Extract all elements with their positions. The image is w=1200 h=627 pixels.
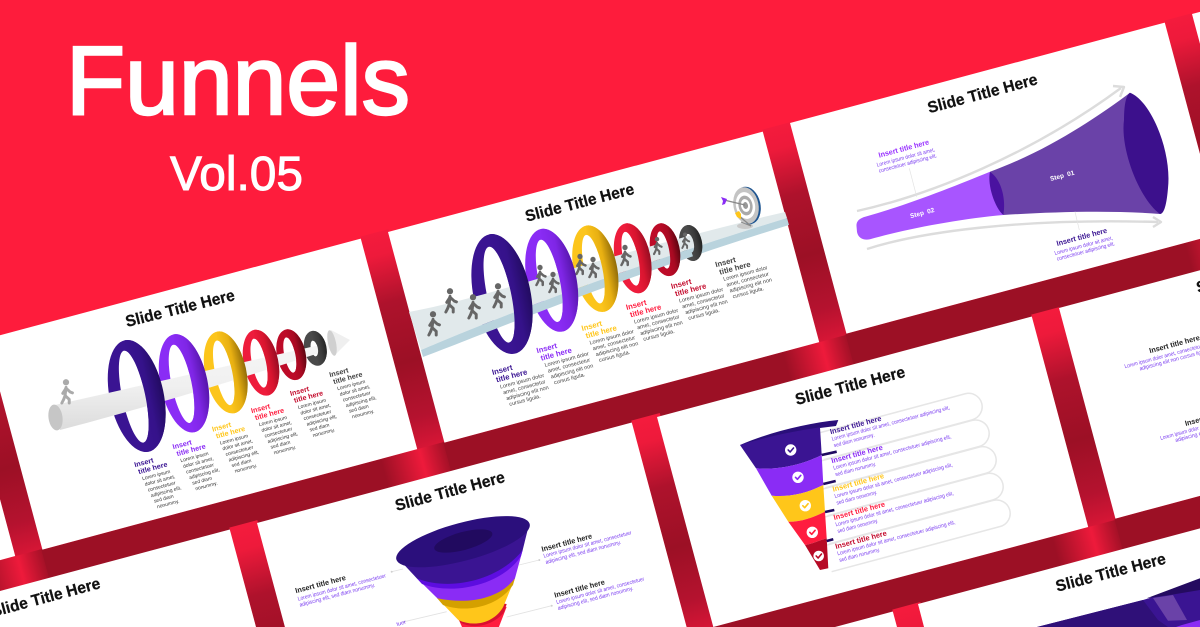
text columns: adipiscing elit non <box>506 385 549 402</box>
text columns: nonummy. <box>312 427 336 439</box>
panel: slide rings on rod: Slide Title Here <box>124 287 237 331</box>
panel: slide rings on rod <box>0 239 417 550</box>
people walking <box>429 232 689 335</box>
text columns: nonummy. <box>195 481 218 492</box>
text columns <box>491 247 774 410</box>
text columns: Lorem ipsum <box>258 415 288 428</box>
text columns: Insert <box>133 455 155 469</box>
text columns: nonummy. <box>351 409 375 420</box>
text columns: amet, consectetur <box>637 314 681 331</box>
text columns: nonummy. <box>273 445 297 456</box>
callout: lower text <box>1054 212 1116 263</box>
label: step 01: Step 01 <box>1049 170 1076 183</box>
text columns: Lorem ipsum dolor <box>544 351 590 369</box>
text columns: cursus ligula. <box>732 286 765 300</box>
text columns: title here <box>215 424 246 440</box>
text columns: adipiscing elit non <box>550 363 594 380</box>
text columns: amet, consectetur <box>547 358 591 375</box>
text columns: adipiscing elit non <box>640 320 683 337</box>
text columns: Lorem ipsum dolor <box>633 308 679 326</box>
text columns: Lorem ipsum dolor <box>589 329 635 347</box>
funnel cone <box>391 505 535 627</box>
text columns: Lorem ipsum <box>180 451 209 464</box>
text columns: sed diam <box>348 404 369 415</box>
text columns: adipiscing elit non <box>685 299 728 316</box>
list text: sed diam nonummy. <box>833 432 876 449</box>
list text: sed diam nonummy. <box>835 461 877 478</box>
road <box>409 212 789 357</box>
text columns: dolor sit amet, <box>222 438 254 452</box>
text columns: dolor sit amet, <box>300 403 332 417</box>
text columns: Insert <box>535 341 558 355</box>
list text: Insert title here <box>831 471 885 494</box>
text columns: title here <box>629 302 663 319</box>
panel: slide rings on road with target: Slide Title Here <box>523 181 636 226</box>
panel: slide horizontal funnel <box>790 23 1200 334</box>
text columns: nonummy. <box>156 499 180 510</box>
list pills <box>817 390 1013 572</box>
icon: walking person <box>62 379 72 403</box>
text columns: Insert <box>580 319 603 333</box>
funnel stack <box>740 420 838 570</box>
ring backs <box>461 220 706 360</box>
list text: sed diam nonummy. <box>837 518 879 535</box>
text columns: Insert <box>491 363 514 377</box>
callout: left upper text: adipiscing elit, sed diam nonummy. <box>299 583 376 609</box>
callout: upper text: Insert title here <box>877 137 930 160</box>
text columns: title here <box>674 281 708 298</box>
text columns: consectetuer <box>264 426 293 440</box>
callout: right upper text: Insert title here <box>540 531 593 554</box>
list text <box>829 405 956 564</box>
text columns: consectetuer <box>303 409 332 422</box>
text columns: Insert <box>250 401 272 415</box>
text columns: Lorem ipsum <box>337 379 366 392</box>
check icons <box>785 444 824 561</box>
callout: lower text: consectetuer adipiscing elit. <box>1056 241 1116 263</box>
panel: slide cone funnel <box>257 422 687 627</box>
text columns: title here <box>540 345 574 363</box>
text columns: Insert <box>289 384 311 398</box>
text columns: amet, consectetur <box>726 272 770 289</box>
text columns: Insert <box>714 255 737 269</box>
text columns: nonummy. <box>234 463 258 475</box>
text columns: adipiscing elit, <box>228 450 260 464</box>
text columns: Lorem ipsum dolor <box>499 373 545 391</box>
text columns: amet, consectetur <box>503 379 547 396</box>
text columns: consectetuer <box>342 390 372 404</box>
callout: right upper text: adipiscing elit, sed diam nonummy. <box>545 540 622 566</box>
text columns: adipiscing elit, <box>306 414 338 428</box>
text columns: consectetuer <box>186 462 215 476</box>
text columns: cursus ligula. <box>509 394 542 408</box>
funnel fragment <box>1037 578 1200 627</box>
list text: Lorem ipsum dolor sit amet, consectetuer adipiscing elit, <box>831 405 951 443</box>
text columns: adipiscing elit, <box>189 467 220 481</box>
text columns: dolor sit amet, <box>261 420 293 434</box>
text columns: sed diam <box>153 494 174 505</box>
callout: lower text: Insert title here <box>1055 226 1108 248</box>
text columns: cursus ligula. <box>643 329 676 343</box>
panel: slide bottom-right: Slide Title Here <box>1054 551 1168 596</box>
arrow: bottom guide <box>867 217 1161 249</box>
ring fronts <box>122 326 330 452</box>
text columns: cursus ligula. <box>688 308 721 322</box>
list text: Lorem ipsum dolor sit amet, consectetuer adipiscing elit, <box>837 520 956 557</box>
panel: slide funnel list: Slide Title Here <box>793 364 907 409</box>
panel: slide cone funnel: Slide Title Here <box>393 469 507 515</box>
list text: Lorem ipsum dolor sit amet, consectetuer adipiscing elit, <box>834 462 954 500</box>
callout: left upper text: Lorem ipsum dolor sit amet, consectetuer <box>297 573 387 603</box>
text columns: adipiscing elit non <box>595 341 639 358</box>
text columns: title here <box>585 323 619 340</box>
list text: Insert title here <box>829 414 882 436</box>
text columns: cursus ligula. <box>553 372 586 386</box>
main title: Funnels <box>66 26 410 135</box>
text columns: adipiscing elit non <box>729 277 773 294</box>
text columns: consectetuer <box>147 480 177 494</box>
list text: Lorem ipsum dolor sit amet, consectetuer adipiscing elit, <box>833 434 952 472</box>
list text: Lorem ipsum dolor sit amet, consectetuer adipiscing elit, <box>835 491 955 528</box>
list text: Insert title here <box>834 529 888 551</box>
text columns: Lorem ipsum <box>219 433 249 447</box>
text columns: dolor sit amet, <box>182 456 214 470</box>
text columns: consectetuer <box>225 445 254 458</box>
text columns: cursus ligula. <box>598 350 631 364</box>
text columns: sed diam <box>270 440 291 451</box>
funnel: step 01 section <box>990 93 1160 215</box>
text columns <box>133 360 380 513</box>
text columns: sed diam <box>231 458 252 469</box>
list text: sed diam nonummy. <box>836 490 878 507</box>
funnel: joint lens <box>989 172 1004 215</box>
text columns: adipiscing elit, <box>345 395 377 409</box>
text columns: title here <box>254 406 285 422</box>
text columns: title here <box>293 388 324 405</box>
panel: slide funnel list <box>657 316 1088 627</box>
connector lines <box>391 559 553 623</box>
arrow: top guide <box>857 86 1124 211</box>
text columns: dolor sit amet, <box>144 474 176 488</box>
list text: Insert title here <box>830 443 884 465</box>
text columns: dolor sit amet, <box>339 384 371 398</box>
list text: sed diam nonummy. <box>839 547 881 564</box>
rod with arrow tip <box>47 329 350 431</box>
text columns: Lorem ipsum dolor <box>723 265 768 283</box>
label: step 02: Step 02 <box>909 207 936 220</box>
text columns: Insert <box>211 420 233 434</box>
funnel: mouth <box>1123 93 1168 214</box>
panel: slide bottom-left title only <box>0 530 256 627</box>
text columns: title here <box>495 367 529 384</box>
panel: slide right edge <box>1059 208 1200 519</box>
text columns: adipiscing elit, <box>267 431 299 445</box>
text columns: title here <box>332 370 363 386</box>
callout: upper text <box>876 137 938 197</box>
callout: right upper text: Lorem ipsum dolor sit amet, consectetuer <box>543 530 633 560</box>
text columns: adipiscing elit, <box>150 485 182 499</box>
callout: right lower text: Insert title here <box>553 577 606 600</box>
callout: right lower text: Lorem ipsum dolor sit amet, consectetuer <box>556 577 645 606</box>
text columns: title here <box>175 442 207 458</box>
panel: slide rings on road with target <box>388 132 819 443</box>
list text: Insert title here <box>832 500 886 522</box>
callout: right lower text: adipiscing elit, sed diam nonummy. <box>557 586 635 612</box>
text columns: sed diam <box>192 476 213 487</box>
ring backs <box>98 326 330 457</box>
funnel: step 02 section <box>856 172 1003 240</box>
text columns: Insert <box>171 437 193 451</box>
callout: left upper text: Insert title here <box>294 573 347 595</box>
callout: lower text: Lorem ipsum dolor sit amet, <box>1054 236 1114 257</box>
text columns: Insert <box>625 298 648 312</box>
text columns: sed diam <box>309 422 330 433</box>
callout: upper text: Lorem ipsum dolor sit amet, <box>876 147 936 169</box>
panel: slide bottom-right <box>918 528 1200 627</box>
text columns: Insert <box>670 277 693 291</box>
text columns: title here <box>137 460 168 476</box>
subtitle: Vol.05 <box>170 148 303 201</box>
text columns: Lorem ipsum dolor <box>678 287 724 305</box>
text columns: Lorem ipsum <box>297 398 327 411</box>
text columns: title here <box>718 259 752 277</box>
text columns: Lorem ipsum <box>142 469 171 482</box>
text columns: amet, consectetur <box>682 293 726 310</box>
panel: slide horizontal funnel: Slide Title Here <box>926 71 1040 117</box>
text columns: amet, consectetur <box>592 335 636 352</box>
callout: upper text: consectetuer adipiscing elit. <box>878 153 938 175</box>
ring fronts <box>486 220 706 354</box>
icon: target with arrows <box>721 184 764 229</box>
text columns: Insert <box>328 365 350 379</box>
